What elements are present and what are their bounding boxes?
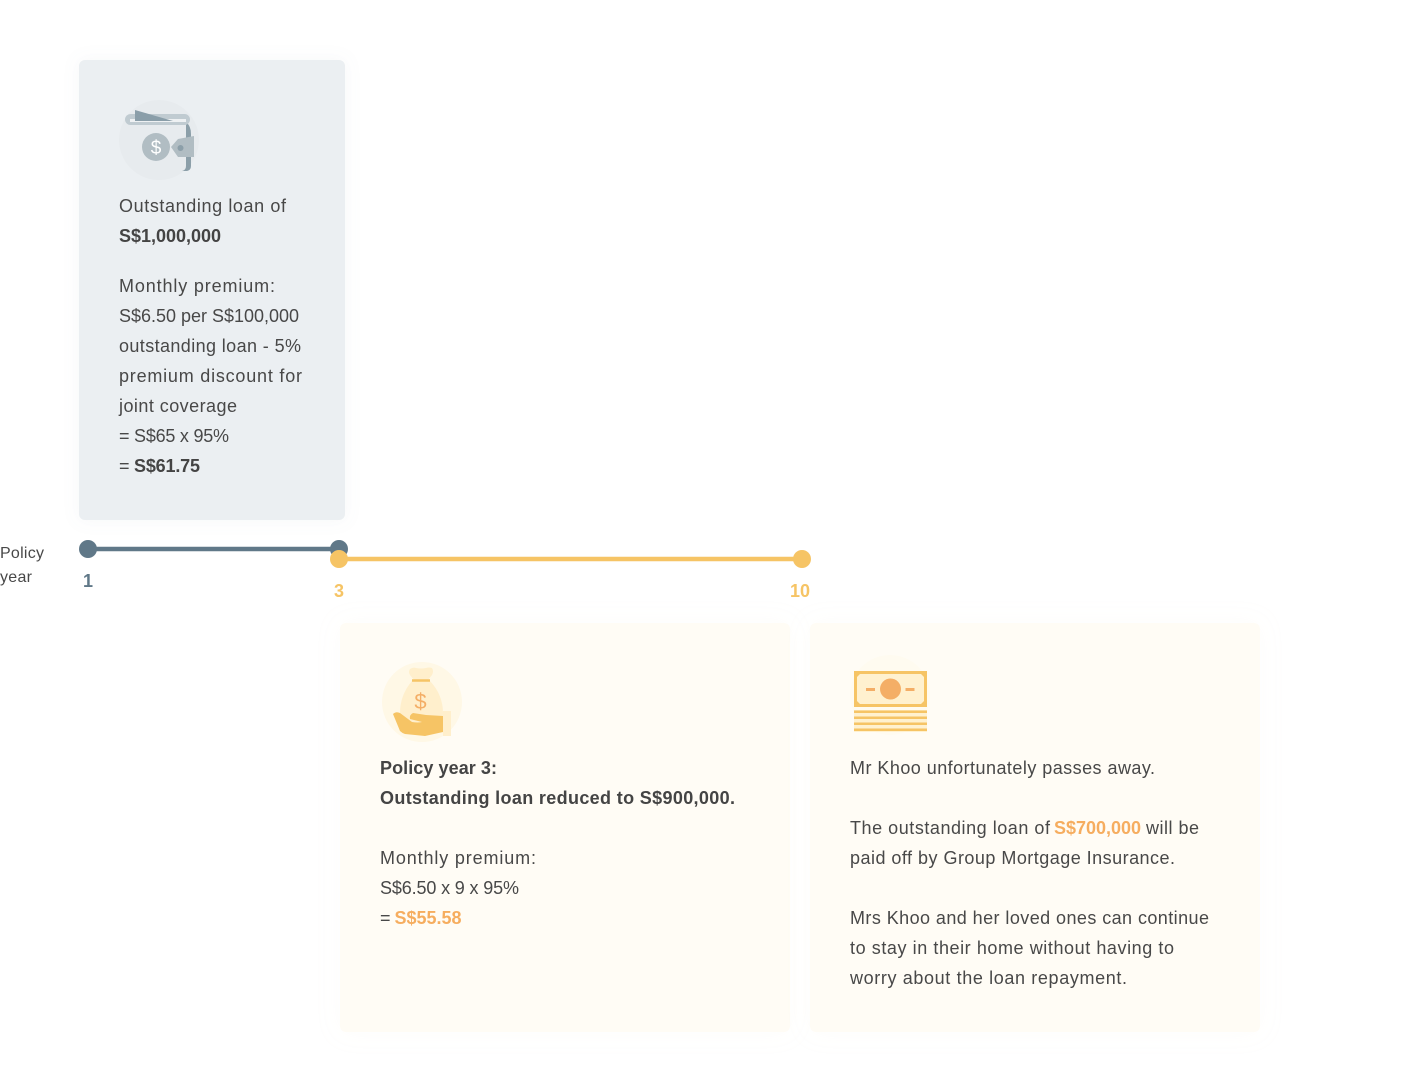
label: policy year: Policy [0,545,44,562]
text: policy year 3 heading: Outstanding loan reduced to S$900,000. [380,788,735,808]
text: family continues to stay [849,908,1209,988]
icon: wallet: $ [151,138,162,159]
text: monthly premium at year 3: S$6.50 x 9 x 95% [380,878,519,898]
text: outstanding loan [119,196,287,246]
text: Mr Khoo statement: Mr Khoo unfortunately passes away. [850,758,1155,778]
text: outstanding loan paid off: The outstanding loan of [850,818,1051,838]
text: monthly premium calculation [118,276,302,476]
timeline: years 1 to 3: 1 [83,571,93,591]
text: family continues to stay: to stay in their home without having to [850,938,1174,958]
icon: wallet [119,100,199,180]
panel: policy year 3 [340,623,790,1032]
text: family continues to stay: worry about the loan repayment. [849,968,1127,988]
text: monthly premium calculation: = S$65 x 95% [119,426,229,446]
icon: money bag in hand: $ [414,689,427,714]
text: policy year 3 heading [380,758,735,808]
text: policy year 3 heading: Policy year 3: [380,758,497,778]
text: outstanding loan: S$1,000,000 [119,226,221,246]
text: outstanding loan paid off: S$700,000 [1054,818,1141,838]
timeline: years 3 to 10 [330,550,811,601]
timeline: years 3 to 10: 3 [334,581,344,601]
icon: money bag in hand [382,662,462,742]
text: outstanding loan paid off: will be [1145,818,1199,838]
text: monthly premium at year 3: = [380,908,391,928]
icon: stack of banknotes [850,655,930,735]
text: monthly premium calculation: = [119,456,130,476]
text: monthly premium calculation: Monthly premium: [119,276,275,296]
text: monthly premium at year 3: Monthly premium: [380,848,536,868]
text: monthly premium at year 3 [380,848,536,928]
text: outstanding loan: Outstanding loan of [119,196,287,216]
text: outstanding loan paid off: paid off by Group Mortgage Insurance. [850,848,1175,868]
panel: outstanding loan of S$1,000,000 [79,60,345,520]
text: monthly premium calculation: S$61.75 [134,456,200,476]
label: policy year: year [0,569,33,586]
text: monthly premium calculation: premium discount for [119,366,302,386]
text: family continues to stay: Mrs Khoo and her loved ones can continue [850,908,1209,928]
text: monthly premium at year 3: S$55.58 [394,908,462,928]
panel: Mr Khoo passes away [810,623,1260,1032]
timeline: years 1 to 3 [79,540,348,591]
text: monthly premium calculation: S$6.50 per S$100,000 [119,306,299,326]
label: policy year [0,545,44,586]
text: outstanding loan paid off [850,818,1199,868]
text: monthly premium calculation: joint coverage [118,396,237,416]
timeline: years 3 to 10: 10 [790,581,810,601]
text: monthly premium calculation: outstanding loan - 5% [119,336,301,356]
